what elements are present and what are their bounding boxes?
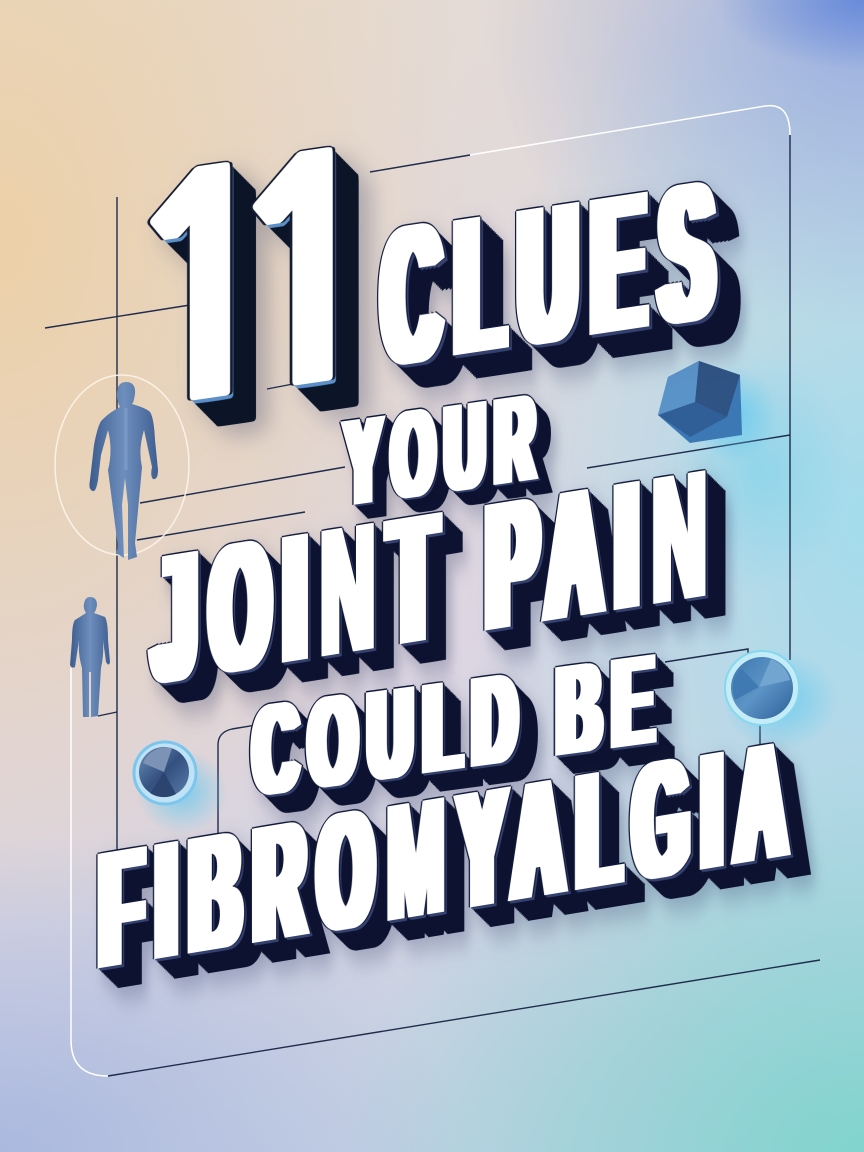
icon: right glowing disc	[722, 650, 838, 750]
title: JOINT PAIN: JOINT PAIN	[154, 428, 722, 722]
icon: left glowing disc	[134, 742, 228, 834]
icon: polyhedron	[658, 361, 777, 463]
title: number 11: 11	[120, 122, 325, 456]
icon: large human figure	[89, 382, 158, 560]
title: YOUR: YOUR	[345, 368, 545, 533]
title: FIBROMYALGIA: FIBROMYALGIA	[100, 704, 800, 1004]
title: COULD BE: COULD BE	[254, 626, 665, 824]
icon: small human figure	[70, 597, 110, 717]
title: CLUES: CLUES	[383, 137, 729, 408]
